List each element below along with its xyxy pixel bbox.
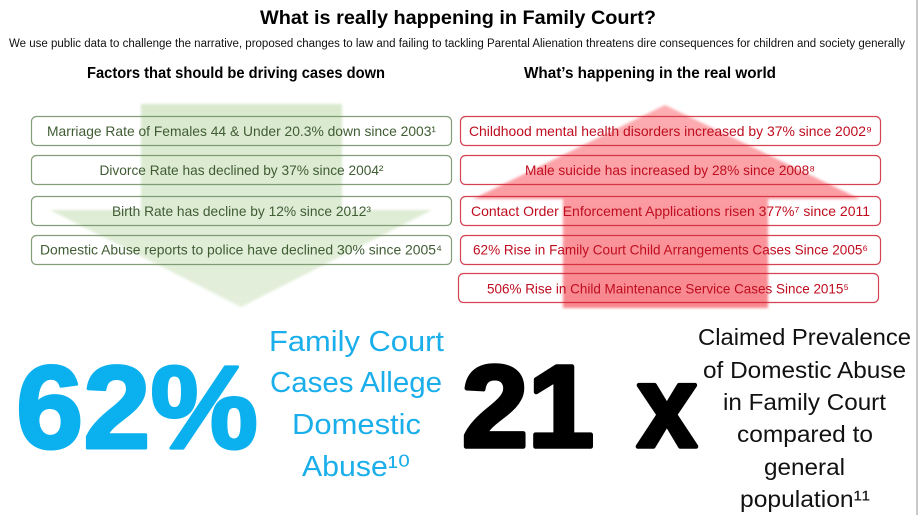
item: child arrangements — [460, 236, 880, 264]
heading: right column: What’s happening in the real world — [524, 65, 776, 82]
icon: green down arrow — [50, 104, 432, 307]
item: child maintenance — [458, 274, 878, 302]
stat label: claimed prevalence: of Domestic Abuse — [703, 357, 906, 383]
panel: rising indicators — [458, 116, 880, 302]
item: childhood mental health — [460, 116, 880, 146]
stat label: family court cases — [269, 326, 444, 483]
title: What is really happening in Family Court? — [260, 7, 656, 29]
item: childhood mental health: Childhood mental health disorders increased by 37% since 2002⁹ — [469, 123, 872, 139]
item: divorce rate: Divorce Rate has declined by 37% since 2004² — [100, 162, 384, 178]
stat label: family court cases: Cases Allege — [270, 367, 442, 399]
stat label: claimed prevalence — [698, 324, 911, 512]
stat label: claimed prevalence: in Family Court — [723, 389, 887, 415]
item: male suicide — [460, 156, 880, 184]
item: contact order enforcement: Contact Order Enforcement Applications risen 377%⁷ since 2011 — [471, 203, 870, 219]
item: male suicide: Male suicide has increased by 28% since 2008⁸ — [525, 162, 815, 178]
item: birth rate — [32, 196, 452, 226]
item: contact order enforcement — [460, 196, 880, 226]
item: marriage rate — [32, 116, 452, 146]
item: marriage rate: Marriage Rate of Females 44 & Under 20.3% down since 2003¹ — [47, 123, 436, 139]
stat label: claimed prevalence: Claimed Prevalence — [698, 324, 911, 350]
heading: left column: Factors that should be driving cases down — [87, 65, 385, 82]
stat label: family court cases: Abuse¹⁰ — [302, 451, 410, 483]
stat label: family court cases: Family Court — [269, 326, 444, 358]
big stat: 21 x: 21 — [462, 342, 594, 472]
stat label: family court cases: Domestic — [292, 409, 421, 441]
stat label: claimed prevalence: compared to — [737, 421, 873, 447]
stat label: claimed prevalence: population¹¹ — [740, 486, 870, 512]
big stat: 21 x — [462, 342, 697, 472]
item: birth rate: Birth Rate has decline by 12% since 2012³ — [112, 203, 371, 219]
item: child arrangements: 62% Rise in Family Court Child Arrangements Cases Since 2005⁶ — [473, 242, 868, 258]
item: child maintenance: 506% Rise in Child Maintenance Service Cases Since 2015⁵ — [487, 280, 849, 296]
item: domestic abuse reports: Domestic Abuse reports to police have declined 30% since 2005⁴ — [40, 242, 442, 258]
icon: red up arrow — [473, 105, 860, 308]
item: domestic abuse reports — [32, 236, 452, 264]
stat label: claimed prevalence: general — [764, 454, 845, 480]
big stat: 62%: 62% — [16, 342, 258, 474]
item: divorce rate — [32, 156, 452, 184]
subtitle: We use public data to challenge the narrative, proposed changes to law and failing to tackling Parental Alienation threatens dire consequences for children and society generally — [9, 38, 905, 50]
big stat: 21 x: x — [637, 342, 697, 472]
panel: falling factors — [32, 116, 452, 264]
